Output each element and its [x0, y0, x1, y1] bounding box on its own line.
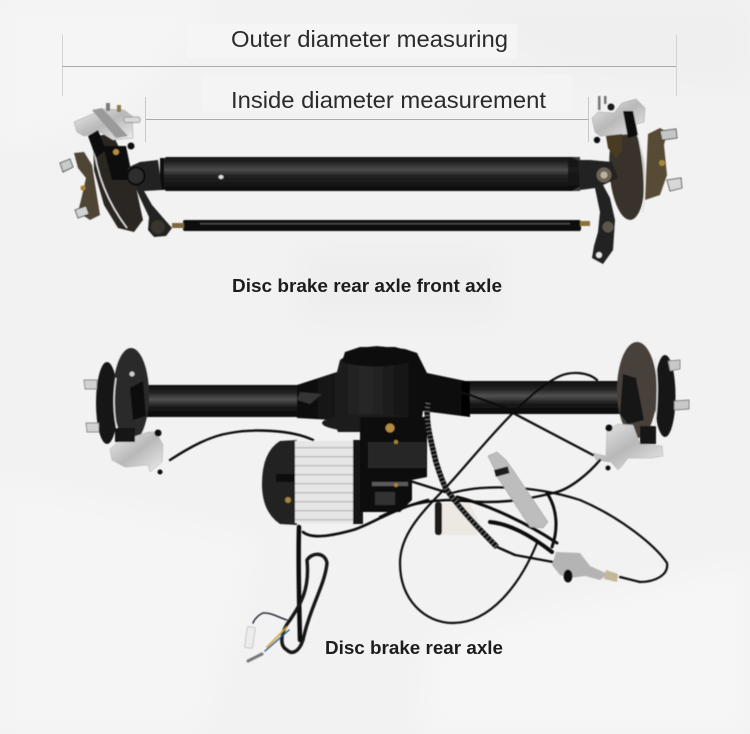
inside diameter dimension — [146, 75, 588, 142]
motor wiring harness — [245, 527, 327, 661]
left brake caliper — [110, 428, 163, 474]
right brake disc and drum — [617, 342, 689, 438]
motor — [262, 440, 363, 525]
left brake caliper — [74, 103, 140, 158]
left brake disc and hub — [60, 133, 143, 232]
differential housing — [297, 346, 470, 432]
front axle caption: Disc brake rear axle front axle — [232, 276, 502, 296]
main axle tube — [160, 157, 580, 191]
corrugated brake hose — [427, 403, 497, 547]
outer diameter label: Outer diameter measuring — [231, 26, 508, 52]
tie rod — [172, 220, 590, 231]
right axle tube — [466, 381, 628, 414]
right brake disc and hub — [606, 121, 682, 221]
rear axle photo illustration — [84, 342, 689, 661]
gearbox — [360, 417, 427, 512]
inside diameter label: Inside diameter measurement — [231, 87, 547, 113]
left brake disc and drum — [84, 348, 149, 444]
front axle photo illustration — [60, 96, 682, 264]
rear axle caption: Disc brake rear axle — [325, 638, 503, 658]
left steering knuckle — [127, 160, 172, 237]
right steering knuckle — [578, 160, 618, 264]
left axle tube — [143, 385, 301, 417]
master cylinder and reservoir — [435, 452, 618, 582]
right brake caliper — [593, 424, 663, 470]
brake cables — [170, 373, 667, 623]
outer diameter dimension — [62, 24, 676, 96]
right brake caliper — [592, 96, 645, 158]
wiring connector — [245, 627, 255, 648]
